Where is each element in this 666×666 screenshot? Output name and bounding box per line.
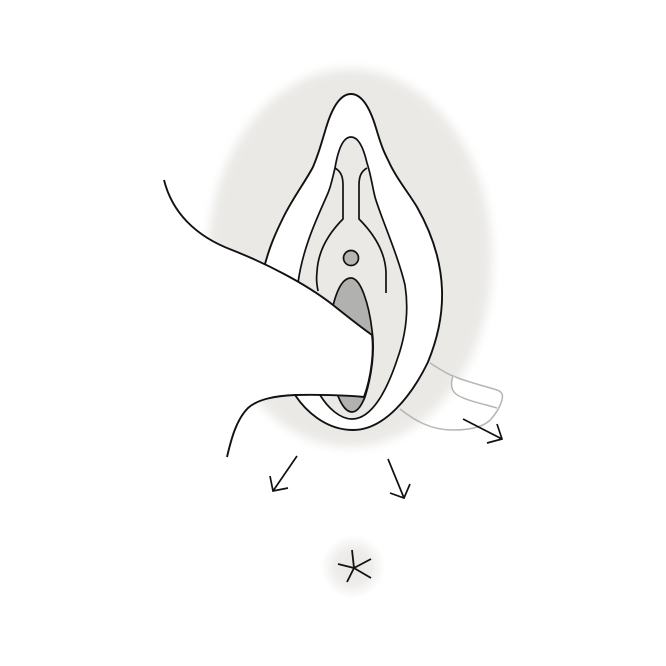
arrow: lower middle [388,459,410,498]
opening [332,278,373,412]
background oval [208,69,492,447]
hand [60,180,373,457]
arrow: right [463,419,502,443]
inner labia [298,137,407,419]
star marker [338,550,371,582]
inner detail lines [317,168,386,293]
clitoris circle [344,250,358,266]
hand outline [164,180,373,457]
star background [321,535,385,599]
outer labia [264,94,442,430]
finger [400,363,502,430]
arrow: lower left [270,456,297,491]
